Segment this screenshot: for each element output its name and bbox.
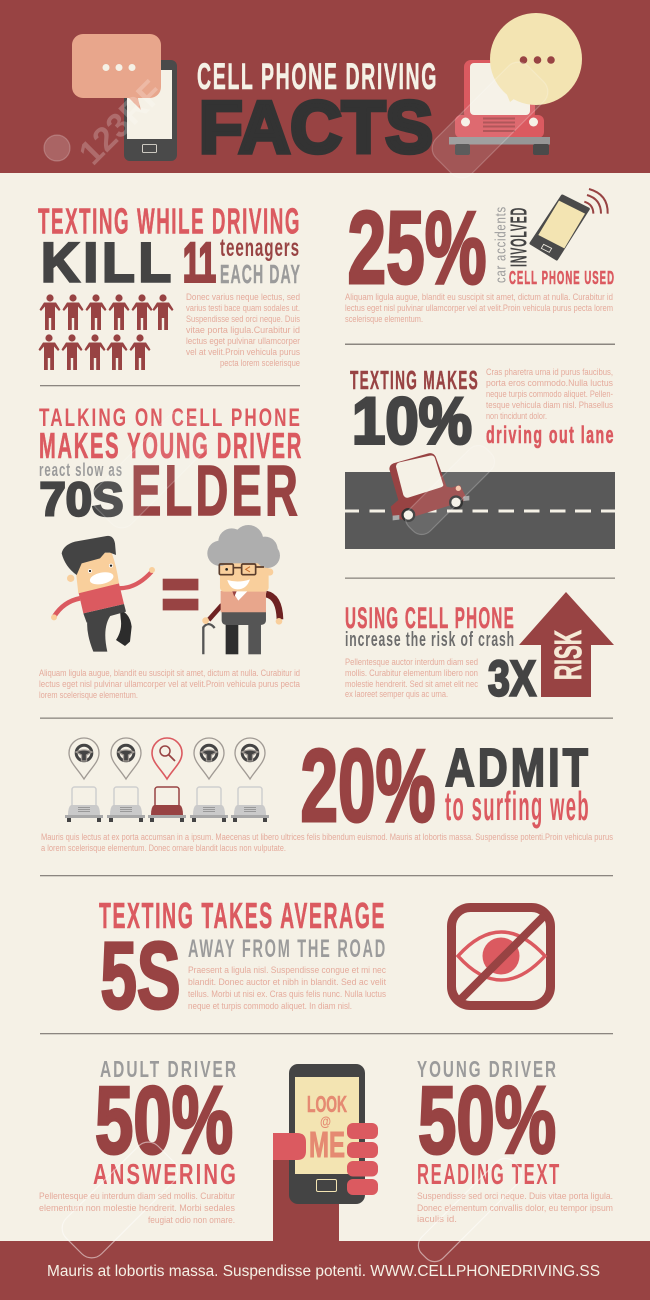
text block [345, 292, 613, 325]
text block: vitae porta ligula.Curabitur id [186, 325, 300, 336]
panel: adult driver [39, 1056, 238, 1226]
heading: admit: ADMIT [445, 739, 591, 798]
watermark stamps [44, 56, 554, 1267]
panel: header [0, 0, 650, 173]
label: teenagers: teenagers [220, 234, 300, 262]
heading: texting takes average: TEXTING TAKES AVERAGE [99, 895, 386, 936]
text block [345, 657, 478, 700]
text block: lorem scelerisque elementum. [39, 690, 138, 701]
panel: 25 percent: INVOLVED [506, 207, 532, 267]
icon row: cars [65, 787, 269, 822]
heading: young driver: YOUNG DRIVER [417, 1056, 558, 1082]
label: react slow as: react slow as [39, 460, 123, 480]
text block: Pellentesque eu interdum diam sed mollis. Curabitur [39, 1191, 236, 1202]
label: look at me: LOOK [307, 1091, 347, 1117]
panel: texting makes 10 percent [345, 365, 615, 549]
text block: Aliquam ligula augue, blandit eu suscipit sit amet, dictum at nulla. Curabitur id [39, 668, 300, 679]
label: car accidents: car accidents [494, 206, 510, 283]
illustration: hand holding phone [273, 1064, 378, 1242]
stat: 50%: 50% [418, 1067, 556, 1174]
stat: kill: KILL [41, 232, 175, 294]
icon: eyes off the road [452, 908, 550, 1006]
character: angry young man [51, 536, 155, 652]
icon: risk arrow [519, 592, 614, 697]
text block [39, 1191, 236, 1226]
icon row: map pins [69, 738, 265, 779]
label: look at me: ME [309, 1124, 345, 1165]
stat: 5s: 5S [100, 923, 180, 1029]
text block: blandit. Donec auctor et nibh in blandit. Sed ac velit [188, 977, 386, 988]
panel: footer [0, 1241, 650, 1300]
heading: cell phone driving: CELL PHONE DRIVING [197, 56, 438, 97]
text block: a lorem scelerisque elementum. Donec ornare blandit lacus non vulputate. [41, 843, 286, 854]
heading: adult driver: ADULT DRIVER [100, 1056, 238, 1082]
illustration: road [345, 472, 615, 549]
heading: talking on cell phone: TALKING ON CELL PHONE [39, 404, 302, 432]
heading: texting while driving: TEXTING WHILE DRIVING [38, 200, 301, 242]
text block: Praesent a ligula nisl. Suspendisse congue et mi nec [188, 965, 386, 976]
text block: Suspendisse sed orci neque. Duis vitae porta ligula. [417, 1191, 613, 1202]
stat: 20%: 20% [300, 728, 436, 843]
heading: facts: FACTS [199, 86, 433, 169]
stat: 50%: 50% [95, 1067, 233, 1174]
text block [41, 832, 613, 854]
text block [186, 292, 301, 369]
panel: 25 percent [345, 189, 615, 325]
text block: tesque vehicula diam nisl. Phasellus [486, 400, 613, 411]
text block: varius testi bace quam sodales ut. [186, 303, 300, 314]
text block: tellus. Morbi ut nisi ex. Cras quis felis nunc. Nulla luctus [188, 989, 386, 1000]
text block: Suspendisse sed orci neque. Duis [186, 314, 300, 325]
panel: talking on cell phone [39, 404, 303, 701]
label: look at me: @ [320, 1113, 331, 1129]
text block: elementum non molestie hendrerit. Morbi sedales [39, 1203, 235, 1214]
label: risk: RISK [548, 630, 590, 680]
icon: equals sign [163, 579, 198, 610]
stat: 70s: 70S [40, 472, 124, 526]
heading: makes young driver: MAKES YOUNG DRIVER [39, 425, 303, 466]
heading: texting makes: TEXTING MAKES [350, 365, 479, 395]
label: away from the road: AWAY FROM THE ROAD [188, 935, 387, 963]
text block [417, 1191, 613, 1225]
text block: Donec varius neque lectus, sed [186, 292, 300, 303]
text block: pecta lorem scelerisque [220, 358, 300, 369]
stat: 3x: 3X [488, 650, 536, 706]
icon row: eleven people [38, 294, 174, 370]
text block [39, 668, 301, 701]
text block: mollis. Curabitur elementum libero non [345, 668, 478, 679]
text block: lectus eget pulvinar ullamcorper [186, 336, 301, 347]
text block: iaculis id. [417, 1214, 457, 1225]
text block: ex laoreet semper quis ac urna. [345, 689, 448, 700]
text block: Cras pharetra urna id purus faucibus, [486, 367, 613, 378]
text block: porta eros commodo.Nulla luctus [486, 378, 613, 389]
illustration: young driver equals elder [51, 525, 282, 654]
panel: using cell phone risk [345, 592, 614, 706]
text block: scelerisque elementum. [345, 314, 423, 325]
stat: 11: 11 [183, 230, 216, 294]
text block: vel at velit.Proin vehicula purus [186, 347, 300, 358]
watermark stamps: 123RF [72, 73, 171, 172]
icon: car with speech bubble [449, 13, 582, 155]
text block [188, 965, 386, 1012]
stat: 10%: 10% [352, 384, 472, 458]
icon: phone with speech bubble [72, 34, 177, 161]
text block: neque et turpis commodo aliquet. In diam nisl. [188, 1001, 352, 1012]
stat: 25%: 25% [348, 190, 486, 305]
heading: elder: ELDER [131, 452, 301, 531]
text block: non tincidunt dolor. [486, 411, 547, 422]
footer text: Mauris at lobortis massa. Suspendisse potenti. WWW.CELLPHONEDRIVING.SS [47, 1263, 600, 1280]
panel: texting takes 5 seconds [99, 895, 550, 1029]
character: elderly man [202, 525, 282, 654]
panel: texting while driving [38, 200, 301, 370]
text block [486, 367, 613, 422]
label: each day: EACH DAY [220, 259, 301, 289]
label: look at me [307, 1091, 347, 1165]
label: increase the risk of crash: increase the risk of crash [345, 629, 515, 651]
panel: 20 percent admit [41, 728, 613, 854]
text block: molestie hendrerit. Sed sit amet elit nec [345, 679, 478, 690]
label: answering: ANSWERING [93, 1159, 238, 1191]
text block: Donec elementum convallis dolor, eu tempor ipsum [417, 1203, 613, 1214]
text block: feugiat odio non omare. [148, 1215, 235, 1226]
icon: ringing phone [531, 189, 608, 259]
text block: lectus eget nisl pulvinar ullamcorper vel at velit.Proin vehicula purus pecta [39, 679, 301, 690]
text block: neque turpis commodo aliquet. Pellen- [486, 389, 613, 400]
text block: Pellentesque auctor interdum diam sed [345, 657, 478, 668]
panel: young driver [417, 1056, 613, 1225]
icon: car drifting out of lane [389, 453, 469, 522]
